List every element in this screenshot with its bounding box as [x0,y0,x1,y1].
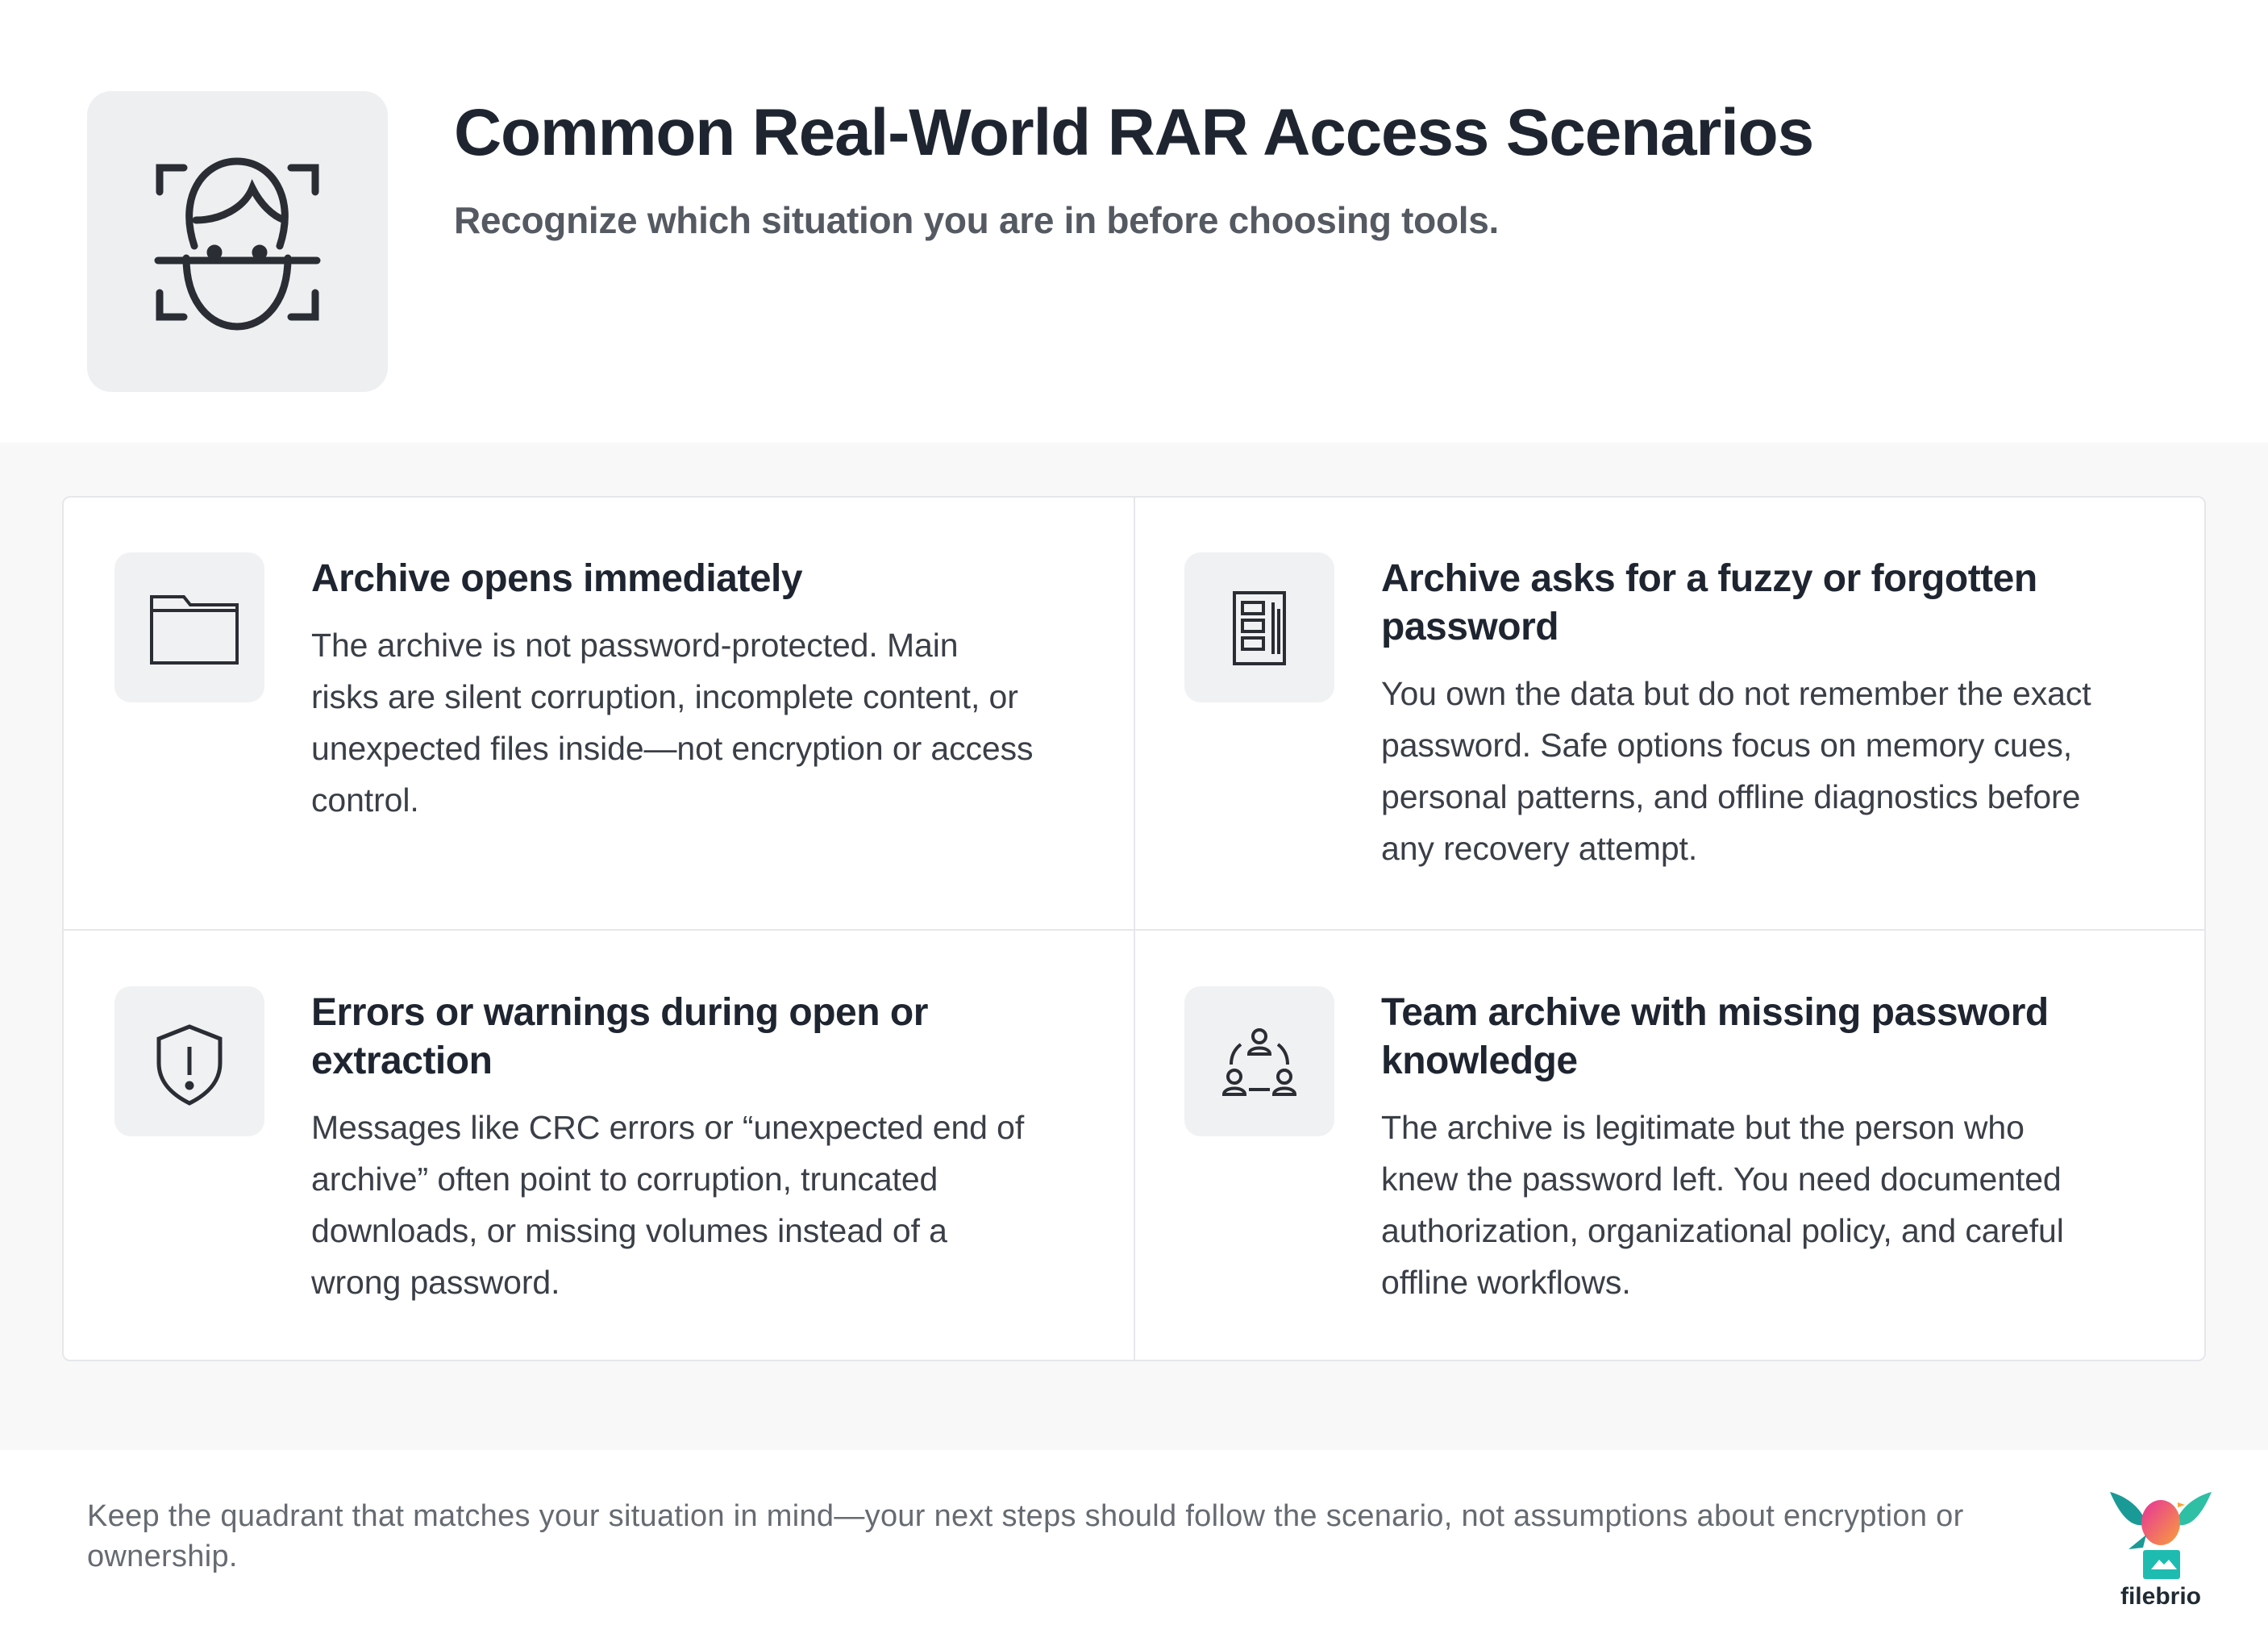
text: forgotten password [1381,675,2091,867]
footer text [87,1499,1964,1573]
heading: errors: extraction [311,1040,492,1082]
footer text: Keep the quadrant that matches your situation in mind—your next steps should follow the scenario, not assumptions about encryption or [87,1499,1964,1533]
text: team archive: authorization, organizational policy, and careful [1381,1212,2064,1249]
text: forgotten password: password. Safe options focus on memory cues, [1381,727,2072,764]
text: errors: Messages like CRC errors or “unexpected end of [311,1109,1024,1146]
text: errors [311,1109,1024,1301]
text: team archive: knew the password left. You need documented [1381,1161,2062,1198]
icon: list document [1184,552,1334,702]
text: team archive: The archive is legitimate but the person who [1381,1109,2025,1146]
icon: shield warning [114,986,264,1136]
heading: errors: Errors or warnings during open or [311,991,928,1034]
heading: forgotten password: password [1381,606,1558,648]
heading: team archive: knowledge [1381,1040,1578,1082]
heading: opens immediately: Archive opens immediately [311,557,802,600]
text: opens immediately: The archive is not password-protected. Main [311,627,958,664]
heading: team archive [1381,991,2049,1082]
gray band [0,443,2268,1450]
text: opens immediately: risks are silent corruption, incomplete content, or [311,678,1018,715]
text: forgotten password: You own the data but do not remember the exact [1381,675,2091,712]
text: errors: wrong password. [311,1264,560,1301]
title: Common Real-World RAR Access Scenarios [454,96,1813,169]
text: opens immediately: control. [311,781,419,819]
text: opens immediately [311,627,1033,819]
header icon: face scan [87,91,388,392]
text: forgotten password: any recovery attempt. [1381,830,1697,867]
text: opens immediately: unexpected files inside—not encryption or access [311,730,1033,767]
logo: filebrio: filebrio [2120,1583,2201,1610]
heading: forgotten password: Archive asks for a fuzzy or forgotten [1381,557,2037,600]
panel: quadrant card [62,496,2206,1361]
icon: team [1184,986,1334,1136]
text: forgotten password: personal patterns, and offline diagnostics before [1381,778,2080,815]
text: team archive [1381,1109,2064,1301]
text: errors: downloads, or missing volumes instead of a [311,1212,947,1249]
subtitle: Recognize which situation you are in before choosing tools. [454,199,1499,241]
text: errors: archive” often point to corruption, truncated [311,1161,938,1198]
text: team archive: offline workflows. [1381,1264,1631,1301]
logo: filebrio [2110,1492,2212,1610]
icon: folder [114,552,264,702]
heading: errors [311,991,928,1082]
footer text: ownership. [87,1540,238,1573]
heading: team archive: Team archive with missing password [1381,991,2049,1034]
heading: forgotten password [1381,557,2037,648]
